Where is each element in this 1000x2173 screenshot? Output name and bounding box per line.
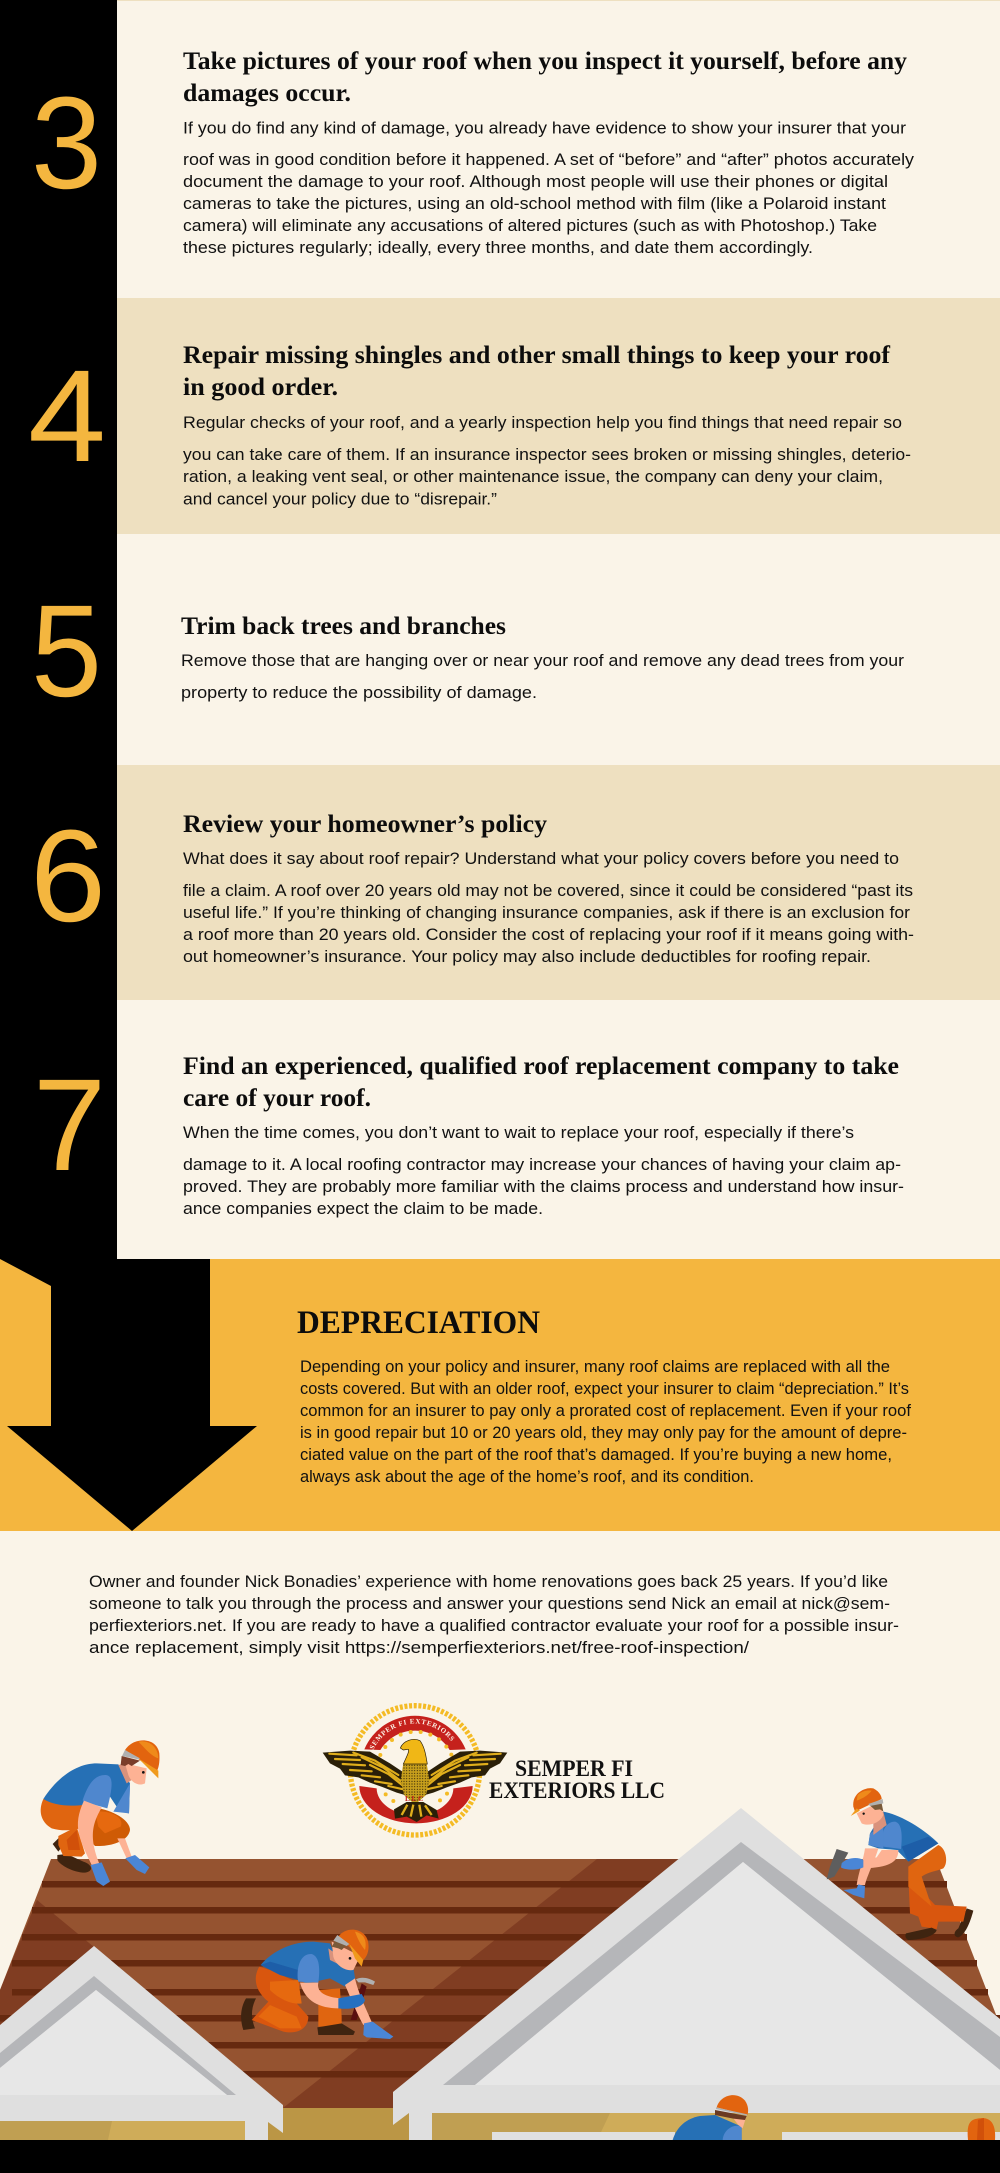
- panel: step 4: [117, 298, 1000, 534]
- text block: step 4: and cancel your policy due to “disrepair.”: [183, 490, 497, 508]
- number 6: 6: [30, 802, 106, 949]
- text block: step 7: When the time comes, you don’t want to wait to replace your roof, especially if there’s: [183, 1124, 854, 1142]
- number 4: 4: [28, 342, 106, 489]
- black footer band: [0, 2140, 1000, 2173]
- logo: Semper Fi Exteriors: [322, 1703, 665, 1838]
- panel: step 6: [117, 765, 1000, 1000]
- text block: depreciation: always ask about the age of the home’s roof, and its condition.: [300, 1468, 754, 1486]
- right house gable: [393, 1808, 1000, 2140]
- emblem: LLC: [405, 1794, 425, 1803]
- text block: depreciation: costs covered. But with an older roof, expect your insurer to claim “depreciation.” It’s: [300, 1380, 909, 1398]
- emblem: SEMPER FI EXTERIORS: [370, 1718, 454, 1750]
- wordmark: SEMPER FI: [515, 1756, 633, 1781]
- text block: step 4: you can take care of them. If an insurance inspector sees broken or missing shingles, deterio-: [183, 446, 911, 464]
- heading: step 3: [183, 48, 908, 107]
- illustration: roof and houses: [0, 1808, 1000, 2140]
- centre wall: [260, 2108, 420, 2140]
- text block: step 3: document the damage to your roof. Although most people will use their phones or digital: [183, 173, 888, 191]
- heading: step 3: damages occur.: [183, 80, 351, 107]
- heading: step 4: in good order.: [183, 374, 338, 401]
- text block: step 6: What does it say about roof repair? Understand what your policy covers before you need to: [183, 850, 899, 868]
- text block: depreciation: is in good repair but 10 or 20 years old, they may only pay for the amount of depre-: [300, 1424, 907, 1442]
- text block: step 3: [183, 120, 915, 257]
- text block: step 6: [183, 850, 914, 966]
- heading: depreciation: DEPRECIATION: [297, 1305, 540, 1341]
- text block: owner contact: [89, 1573, 899, 1657]
- wordmark: [489, 1756, 665, 1803]
- text block: owner contact: Owner and founder Nick Bonadies’ experience with home renovations goes back 25 years. If you’d like: [89, 1573, 888, 1591]
- panel: step 5: [117, 534, 1000, 765]
- heading: step 4: Repair missing shingles and other small things to keep your roof: [183, 342, 891, 369]
- text block: step 6: file a claim. A roof over 20 years old may not be covered, since it could be considered “past its: [183, 882, 913, 900]
- text block: depreciation: ciated value on the part of the roof that’s damaged. If you’re buying a new home,: [300, 1446, 892, 1464]
- text block: step 3: camera) will eliminate any accusations of altered pictures (such as with Photoshop.) Take: [183, 217, 877, 235]
- text block: depreciation: common for an insurer to pay only a prorated cost of replacement. Even if your roof: [300, 1402, 911, 1420]
- text block: step 7: ance companies expect the claim to be made.: [183, 1200, 543, 1218]
- heading: step 6: Review your homeowner’s policy: [183, 811, 548, 838]
- worker: helmet at bottom right: [968, 2118, 995, 2140]
- text block: depreciation: Depending on your policy and insurer, many roof claims are replaced with all the: [300, 1358, 890, 1376]
- worker: bottom centre, partly hidden: [673, 2095, 748, 2140]
- text block: owner contact: perfiexteriors.net. If you are ready to have a qualified contractor evaluate your roof for a possible insur-: [89, 1617, 899, 1635]
- heading: step 5: Trim back trees and branches: [181, 613, 506, 640]
- heading: step 7: Find an experienced, qualified roof replacement company to take: [183, 1053, 899, 1080]
- text block: owner contact: ance replacement, simply visit https://semperfiexteriors.net/free-roof-inspection/: [89, 1639, 749, 1657]
- worker: with nail gun at right: [827, 1788, 973, 1940]
- text block: step 4: ration, a leaking vent seal, or other maintenance issue, the company can deny your claim,: [183, 468, 883, 486]
- panel: depreciation: [0, 1259, 1000, 1531]
- worker: kneeling with hammer: [241, 1930, 393, 2039]
- text block: step 5: [181, 652, 905, 702]
- text block: step 7: damage to it. A local roofing contractor may increase your chances of having your claim ap-: [183, 1156, 901, 1174]
- roof: [0, 1859, 1000, 2108]
- worker: crouching at top left: [41, 1740, 159, 1886]
- text block: step 6: useful life.” If you’re thinking of changing insurance companies, ask if there is an exclusion for: [183, 904, 911, 922]
- text block: step 3: these pictures regularly; ideally, every three months, and date them accordingly.: [183, 239, 813, 257]
- text block: step 3: If you do find any kind of damage, you already have evidence to show your insurer that your: [183, 120, 907, 138]
- text block: step 4: [183, 414, 911, 508]
- emblem: [322, 1703, 508, 1838]
- heading: step 3: Take pictures of your roof when you inspect it yourself, before any: [183, 48, 908, 75]
- text block: step 3: cameras to take the pictures, using an old-school method with film (like a Polaroid instant: [183, 195, 886, 213]
- text block: step 5: property to reduce the possibility of damage.: [181, 684, 537, 702]
- heading: step 7: [183, 1053, 899, 1112]
- heading: step 4: [183, 342, 891, 401]
- text block: step 5: Remove those that are hanging over or near your roof and remove any dead trees from your: [181, 652, 905, 670]
- number 5: 5: [31, 577, 102, 724]
- text block: depreciation: [300, 1358, 911, 1486]
- text block: step 6: a roof more than 20 years old. Consider the cost of replacing your roof if it means going with-: [183, 926, 914, 944]
- text block: step 3: roof was in good condition before it happened. A set of “before” and “after” photos accurately: [183, 151, 915, 169]
- text block: step 7: [183, 1124, 904, 1218]
- wordmark: EXTERIORS LLC: [489, 1778, 665, 1803]
- text block: owner contact: someone to talk you through the process and answer your questions send Nick an email at nick@sem-: [89, 1595, 890, 1613]
- black column and down arrow: [0, 0, 257, 1531]
- number 7: 7: [33, 1051, 106, 1198]
- panel: step 3: [117, 0, 1000, 298]
- number 3: 3: [31, 69, 102, 216]
- text block: step 7: proved. They are probably more familiar with the claims process and understand how insur-: [183, 1178, 904, 1196]
- left house gable: [0, 1946, 283, 2140]
- text block: step 4: Regular checks of your roof, and a yearly inspection help you find things that need repair so: [183, 414, 902, 432]
- text block: step 6: out homeowner’s insurance. Your policy may also include deductibles for roofing repair.: [183, 948, 871, 966]
- panel: step 7: [117, 1000, 1000, 1259]
- heading: step 7: care of your roof.: [183, 1085, 371, 1112]
